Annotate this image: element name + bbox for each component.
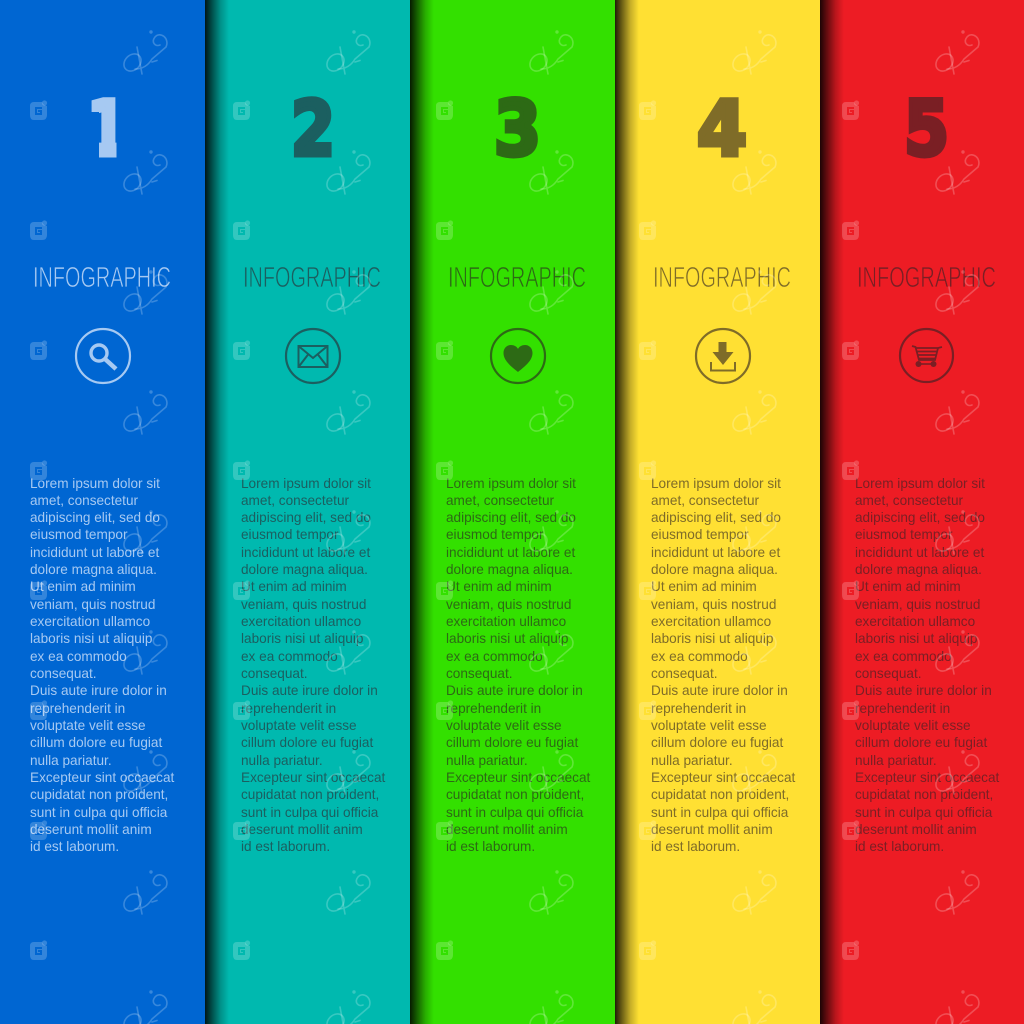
body text: dolore magna aliqua. bbox=[446, 562, 573, 577]
body text: sunt in culpa qui officia bbox=[241, 805, 378, 820]
body text: Ut enim ad minim bbox=[241, 579, 347, 594]
body text: Ut enim ad minim bbox=[446, 579, 552, 594]
body text: dolore magna aliqua. bbox=[651, 562, 778, 577]
body text: id est laborum. bbox=[30, 839, 119, 854]
body text: cillum dolore eu fugiat bbox=[651, 735, 783, 750]
body text: Ut enim ad minim bbox=[855, 579, 961, 594]
body text: Excepteur sint occaecat bbox=[241, 770, 385, 785]
body text: laboris nisi ut aliquip bbox=[651, 631, 773, 646]
number 2: 2 bbox=[291, 84, 335, 173]
body text: cillum dolore eu fugiat bbox=[446, 735, 578, 750]
body text: Excepteur sint occaecat bbox=[30, 770, 174, 785]
body text: voluptate velit esse bbox=[241, 718, 357, 733]
body text: id est laborum. bbox=[651, 839, 740, 854]
body text: id est laborum. bbox=[446, 839, 535, 854]
body text: reprehenderit in bbox=[30, 701, 125, 716]
body text: voluptate velit esse bbox=[446, 718, 562, 733]
inner shadow bbox=[410, 0, 434, 1024]
body text: voluptate velit esse bbox=[855, 718, 971, 733]
number 4: 4 bbox=[697, 84, 747, 173]
body text: Lorem ipsum dolor sit bbox=[241, 476, 371, 490]
body text: Excepteur sint occaecat bbox=[651, 770, 795, 785]
body text: Excepteur sint occaecat bbox=[446, 770, 590, 785]
body text: amet, consectetur bbox=[241, 493, 349, 508]
body text: Duis aute irure dolor in bbox=[651, 683, 788, 698]
body text: nulla pariatur. bbox=[241, 753, 323, 768]
body text: Duis aute irure dolor in bbox=[30, 683, 167, 698]
body text: voluptate velit esse bbox=[651, 718, 767, 733]
body text: Duis aute irure dolor in bbox=[241, 683, 378, 698]
number 5: 5 bbox=[904, 84, 949, 173]
body text: adipiscing elit, sed do bbox=[446, 510, 576, 525]
panel 4: yellow bbox=[615, 0, 820, 1024]
number 1: 1 bbox=[87, 84, 127, 173]
body text: laboris nisi ut aliquip bbox=[446, 631, 568, 646]
body text: nulla pariatur. bbox=[855, 753, 937, 768]
body text: veniam, quis nostrud bbox=[30, 597, 155, 612]
body text: consequat. bbox=[446, 666, 513, 681]
body text: Duis aute irure dolor in bbox=[855, 683, 992, 698]
body text: ex ea commodo bbox=[855, 649, 952, 664]
body text: sunt in culpa qui officia bbox=[446, 805, 583, 820]
body text: sunt in culpa qui officia bbox=[855, 805, 992, 820]
body text: cupidatat non proident, bbox=[855, 787, 993, 802]
body text: reprehenderit in bbox=[241, 701, 336, 716]
body text: adipiscing elit, sed do bbox=[241, 510, 371, 525]
body text: deserunt mollit anim bbox=[651, 822, 773, 837]
body text: cillum dolore eu fugiat bbox=[30, 735, 162, 750]
body text: ex ea commodo bbox=[241, 649, 338, 664]
icon: heart bbox=[490, 328, 546, 384]
body text bbox=[651, 476, 796, 854]
body text bbox=[30, 476, 174, 854]
body text: cupidatat non proident, bbox=[651, 787, 789, 802]
body text: id est laborum. bbox=[241, 839, 330, 854]
body text: incididunt ut labore et bbox=[446, 545, 575, 560]
body text: veniam, quis nostrud bbox=[855, 597, 980, 612]
body text: incididunt ut labore et bbox=[651, 545, 780, 560]
panel 3: green bbox=[410, 0, 615, 1024]
inner shadow bbox=[205, 0, 229, 1024]
panel 2: teal bbox=[205, 0, 410, 1024]
body text: amet, consectetur bbox=[855, 493, 963, 508]
body text: Excepteur sint occaecat bbox=[855, 770, 999, 785]
body text: deserunt mollit anim bbox=[30, 822, 152, 837]
body text: cillum dolore eu fugiat bbox=[241, 735, 373, 750]
body text: Lorem ipsum dolor sit bbox=[30, 476, 160, 490]
body text: exercitation ullamco bbox=[241, 614, 361, 629]
body text: incididunt ut labore et bbox=[30, 545, 159, 560]
body text: deserunt mollit anim bbox=[241, 822, 363, 837]
body text: ex ea commodo bbox=[446, 649, 543, 664]
number 3: 3 bbox=[494, 84, 541, 173]
body text: cupidatat non proident, bbox=[446, 787, 584, 802]
body text bbox=[855, 476, 1000, 854]
body text: consequat. bbox=[241, 666, 308, 681]
body text: exercitation ullamco bbox=[651, 614, 771, 629]
body text: amet, consectetur bbox=[446, 493, 554, 508]
body text: adipiscing elit, sed do bbox=[651, 510, 781, 525]
body text: incididunt ut labore et bbox=[241, 545, 370, 560]
body text bbox=[241, 476, 386, 854]
body text: laboris nisi ut aliquip bbox=[241, 631, 363, 646]
body text: reprehenderit in bbox=[446, 701, 541, 716]
body text: dolore magna aliqua. bbox=[30, 562, 157, 577]
body text: incididunt ut labore et bbox=[855, 545, 984, 560]
body text: Ut enim ad minim bbox=[30, 579, 136, 594]
body text: ex ea commodo bbox=[651, 649, 748, 664]
body text: consequat. bbox=[855, 666, 922, 681]
body text: Ut enim ad minim bbox=[651, 579, 757, 594]
icon: magnifier bbox=[74, 328, 132, 384]
icon: download bbox=[694, 328, 752, 384]
body text: sunt in culpa qui officia bbox=[30, 805, 167, 820]
body text: cupidatat non proident, bbox=[30, 787, 168, 802]
body text: adipiscing elit, sed do bbox=[855, 510, 985, 525]
body text: Lorem ipsum dolor sit bbox=[855, 476, 985, 490]
body text: eiusmod tempor bbox=[855, 527, 952, 542]
body text: nulla pariatur. bbox=[30, 753, 112, 768]
icon: envelope bbox=[284, 328, 342, 384]
body text: cillum dolore eu fugiat bbox=[855, 735, 987, 750]
body text: adipiscing elit, sed do bbox=[30, 510, 160, 525]
body text: exercitation ullamco bbox=[855, 614, 975, 629]
body text: cupidatat non proident, bbox=[241, 787, 379, 802]
icon: shopping cart bbox=[898, 328, 954, 384]
body text: eiusmod tempor bbox=[241, 527, 338, 542]
body text: laboris nisi ut aliquip bbox=[855, 631, 977, 646]
body text: laboris nisi ut aliquip bbox=[30, 631, 152, 646]
body text: id est laborum. bbox=[855, 839, 944, 854]
body text: nulla pariatur. bbox=[651, 753, 733, 768]
inner shadow bbox=[820, 0, 844, 1024]
panel 1: blue bbox=[0, 0, 205, 1024]
body text: exercitation ullamco bbox=[446, 614, 566, 629]
body text: veniam, quis nostrud bbox=[241, 597, 366, 612]
body text: consequat. bbox=[651, 666, 718, 681]
panel 5: red bbox=[820, 0, 1024, 1024]
body text: amet, consectetur bbox=[30, 493, 138, 508]
body text: voluptate velit esse bbox=[30, 718, 146, 733]
body text: eiusmod tempor bbox=[30, 527, 127, 542]
body text: consequat. bbox=[30, 666, 97, 681]
body text: amet, consectetur bbox=[651, 493, 759, 508]
body text: veniam, quis nostrud bbox=[651, 597, 776, 612]
body text: Lorem ipsum dolor sit bbox=[651, 476, 781, 490]
body text: dolore magna aliqua. bbox=[241, 562, 368, 577]
body text: ex ea commodo bbox=[30, 649, 127, 664]
body text: veniam, quis nostrud bbox=[446, 597, 571, 612]
body text bbox=[446, 476, 590, 854]
body text: nulla pariatur. bbox=[446, 753, 528, 768]
body text: deserunt mollit anim bbox=[855, 822, 977, 837]
body text: sunt in culpa qui officia bbox=[651, 805, 788, 820]
body text: dolore magna aliqua. bbox=[855, 562, 982, 577]
body text: Duis aute irure dolor in bbox=[446, 683, 583, 698]
body text: Lorem ipsum dolor sit bbox=[446, 476, 576, 490]
body text: reprehenderit in bbox=[855, 701, 950, 716]
body text: eiusmod tempor bbox=[651, 527, 748, 542]
body text: exercitation ullamco bbox=[30, 614, 150, 629]
body text: eiusmod tempor bbox=[446, 527, 543, 542]
body text: reprehenderit in bbox=[651, 701, 746, 716]
body text: deserunt mollit anim bbox=[446, 822, 568, 837]
inner shadow bbox=[615, 0, 639, 1024]
